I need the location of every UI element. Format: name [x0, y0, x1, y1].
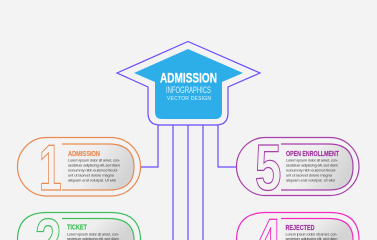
heading: REJECTED: [286, 225, 314, 232]
graduation cap outline: [117, 42, 260, 125]
heading: TICKET: [67, 224, 88, 232]
panel: 2 ticket: [18, 206, 140, 240]
body text: nonummy nibh euismod tincid-: [286, 168, 337, 172]
subtitle: INFOGRAPHICS: [166, 85, 211, 96]
number 1: 1: [39, 131, 62, 204]
body text: [68, 158, 121, 182]
panel: 1 admission: [18, 131, 140, 204]
heading: ADMISSION: [68, 151, 100, 158]
body text: sectetuer adipiscing elit, sed diam: [286, 162, 339, 168]
title: ADMISSION: [160, 70, 217, 86]
body text: unt ut laoreet dolore magna: [286, 172, 333, 178]
body text: Lorem ipsum dolor sit amet, con-: [67, 232, 120, 236]
vector design tagline: VECTOR DESIGN: [167, 96, 211, 102]
body text: Lorem ipsum dolor sit amet, con-: [68, 158, 121, 162]
connector lines: [141, 125, 236, 240]
body text: unt ut laoreet dolore magna: [68, 172, 115, 178]
body text: [286, 158, 339, 182]
body text: [286, 232, 338, 240]
body text: [67, 232, 120, 240]
body text: aliquam erat volutpat. Ut wisi: [286, 178, 335, 182]
body text: sectetuer adipiscing elit, sed diam: [68, 162, 121, 168]
body text: Lorem ipsum dolor sit amet, con-: [286, 158, 339, 162]
panel: 5 open enrollment: [236, 132, 359, 205]
number 5: 5: [255, 132, 281, 205]
body text: Lorem ipsum dolor sit amet, con-: [286, 232, 338, 236]
graduation cap blue panel: [134, 49, 243, 119]
panel: 4 rejected: [236, 206, 359, 240]
body text: aliquam erat volutpat. Ut wisi: [68, 178, 116, 182]
body text: nonummy nibh euismod tincid-: [68, 168, 119, 172]
heading: OPEN ENROLLMENT: [286, 151, 340, 158]
